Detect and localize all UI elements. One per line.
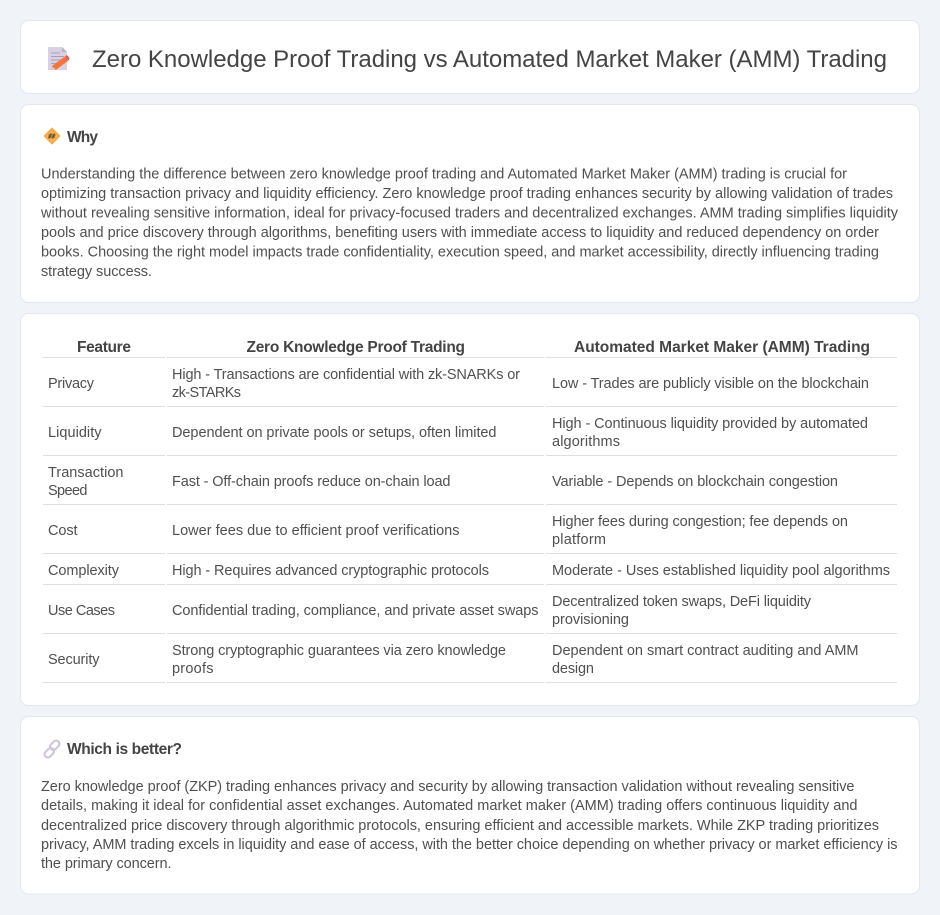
table header row: Automated Market Maker (AMM) Trading	[574, 339, 870, 356]
text block: why paragraph: pools and price discovery through algorithms, benefiting users with immediate access to liquidity and reduced dependency on order	[41, 225, 879, 241]
heading: why: Why	[67, 129, 98, 146]
panel: comparison table	[20, 314, 920, 706]
table row: use cases: provisioning	[552, 612, 629, 628]
text block: which is better paragraph: details, making it ideal for confidential asset exchanges. Automated market maker (AMM) trading offers continuous liquidity and	[41, 798, 858, 814]
table row: liquidity: algorithms	[552, 434, 620, 450]
text block: why paragraph	[40, 166, 899, 280]
text block: why paragraph: books. Choosing the right model impacts trade confidentiality, execution speed, and market accessibility, directly influencing trading	[41, 244, 879, 260]
table row: privacy: High - Transactions are confidential with zk-SNARKs or	[172, 367, 520, 383]
table row: complexity: Complexity	[48, 563, 120, 579]
table row: liquidity: High - Continuous liquidity provided by automated	[552, 416, 868, 432]
table row: privacy	[43, 367, 897, 407]
table row: transaction speed: Speed	[48, 483, 88, 499]
table row: complexity: High - Requires advanced cryptographic protocols	[172, 563, 489, 579]
table row: transaction speed: Fast - Off-chain proofs reduce on-chain load	[172, 474, 450, 490]
table header row: Feature	[77, 339, 131, 356]
table row: cost: platform	[552, 532, 606, 548]
icon: memo with pencil	[48, 47, 70, 70]
table row: cost: Cost	[48, 523, 78, 539]
title: Zero Knowledge Proof Trading vs Automated Market Maker (AMM) Trading	[92, 46, 887, 73]
table row: privacy: zk-STARKs	[172, 385, 241, 401]
text block: which is better paragraph: the primary concern.	[41, 856, 172, 872]
table row: transaction speed: Variable - Depends on blockchain congestion	[552, 474, 838, 490]
text block: why paragraph: Understanding the difference between zero knowledge proof trading and Automated Market Maker (AMM) trading is crucial for	[41, 166, 847, 182]
table row: security: proofs	[172, 661, 214, 677]
table row: use cases: Confidential trading, compliance, and private asset swaps	[172, 603, 538, 619]
text block: which is better paragraph: privacy, AMM trading excels in liquidity and ease of access, with the better choice depending on whether privacy or market efficiency is	[41, 837, 898, 853]
panel: why	[20, 104, 920, 302]
table row: security: Security	[48, 652, 100, 668]
table row: security: Strong cryptographic guarantees via zero knowledge	[172, 643, 506, 659]
table row: cost: Higher fees during congestion; fee depends on	[552, 514, 848, 530]
table row: transaction speed: Transaction	[48, 465, 124, 481]
icon: orange diamond	[44, 128, 60, 144]
table row: liquidity	[43, 416, 897, 456]
text block: which is better paragraph: Zero knowledge proof (ZKP) trading enhances privacy and security by allowing transaction validation without revealing sensitive	[41, 779, 854, 795]
table row: transaction speed	[43, 465, 897, 505]
text block: which is better paragraph	[41, 779, 898, 872]
text block: why paragraph: without revealing sensitive information, ideal for privacy-focused traders and decentralized exchanges. AMM trading simplifies liquidity	[40, 206, 899, 222]
text block: why paragraph: strategy success.	[41, 264, 152, 280]
table row: use cases: Use Cases	[48, 603, 115, 619]
table row: security: design	[552, 661, 594, 677]
table row: cost: Lower fees due to efficient proof verifications	[172, 523, 460, 539]
table row: complexity: Moderate - Uses established liquidity pool algorithms	[552, 563, 890, 579]
table header row: Zero Knowledge Proof Trading	[246, 339, 465, 356]
table row: use cases	[43, 594, 897, 634]
table row: privacy: Privacy	[48, 376, 95, 392]
text block: which is better paragraph: decentralized price discovery through algorithmic protocols, ensuring efficient and accessible markets. While ZKP trading prioritizes	[41, 818, 879, 834]
table row: use cases: Decentralized token swaps, DeFi liquidity	[552, 594, 812, 610]
table row: cost	[43, 514, 897, 554]
panel: title header	[20, 20, 920, 94]
table row: security: Dependent on smart contract auditing and AMM	[552, 643, 858, 659]
table row: privacy: Low - Trades are publicly visible on the blockchain	[552, 376, 869, 392]
table header row	[43, 339, 897, 358]
table row: liquidity: Dependent on private pools or setups, often limited	[172, 425, 496, 441]
table row: complexity	[43, 563, 897, 585]
heading: which is better: Which is better?	[67, 741, 182, 758]
text block: why paragraph: optimizing transaction privacy and liquidity efficiency. Zero knowledge proof trading enhances security by allowing validation of trades	[41, 186, 893, 202]
icon: chain link	[43, 739, 61, 759]
table row: liquidity: Liquidity	[48, 425, 102, 441]
table row: security	[43, 643, 897, 683]
panel: which is better	[20, 716, 920, 894]
